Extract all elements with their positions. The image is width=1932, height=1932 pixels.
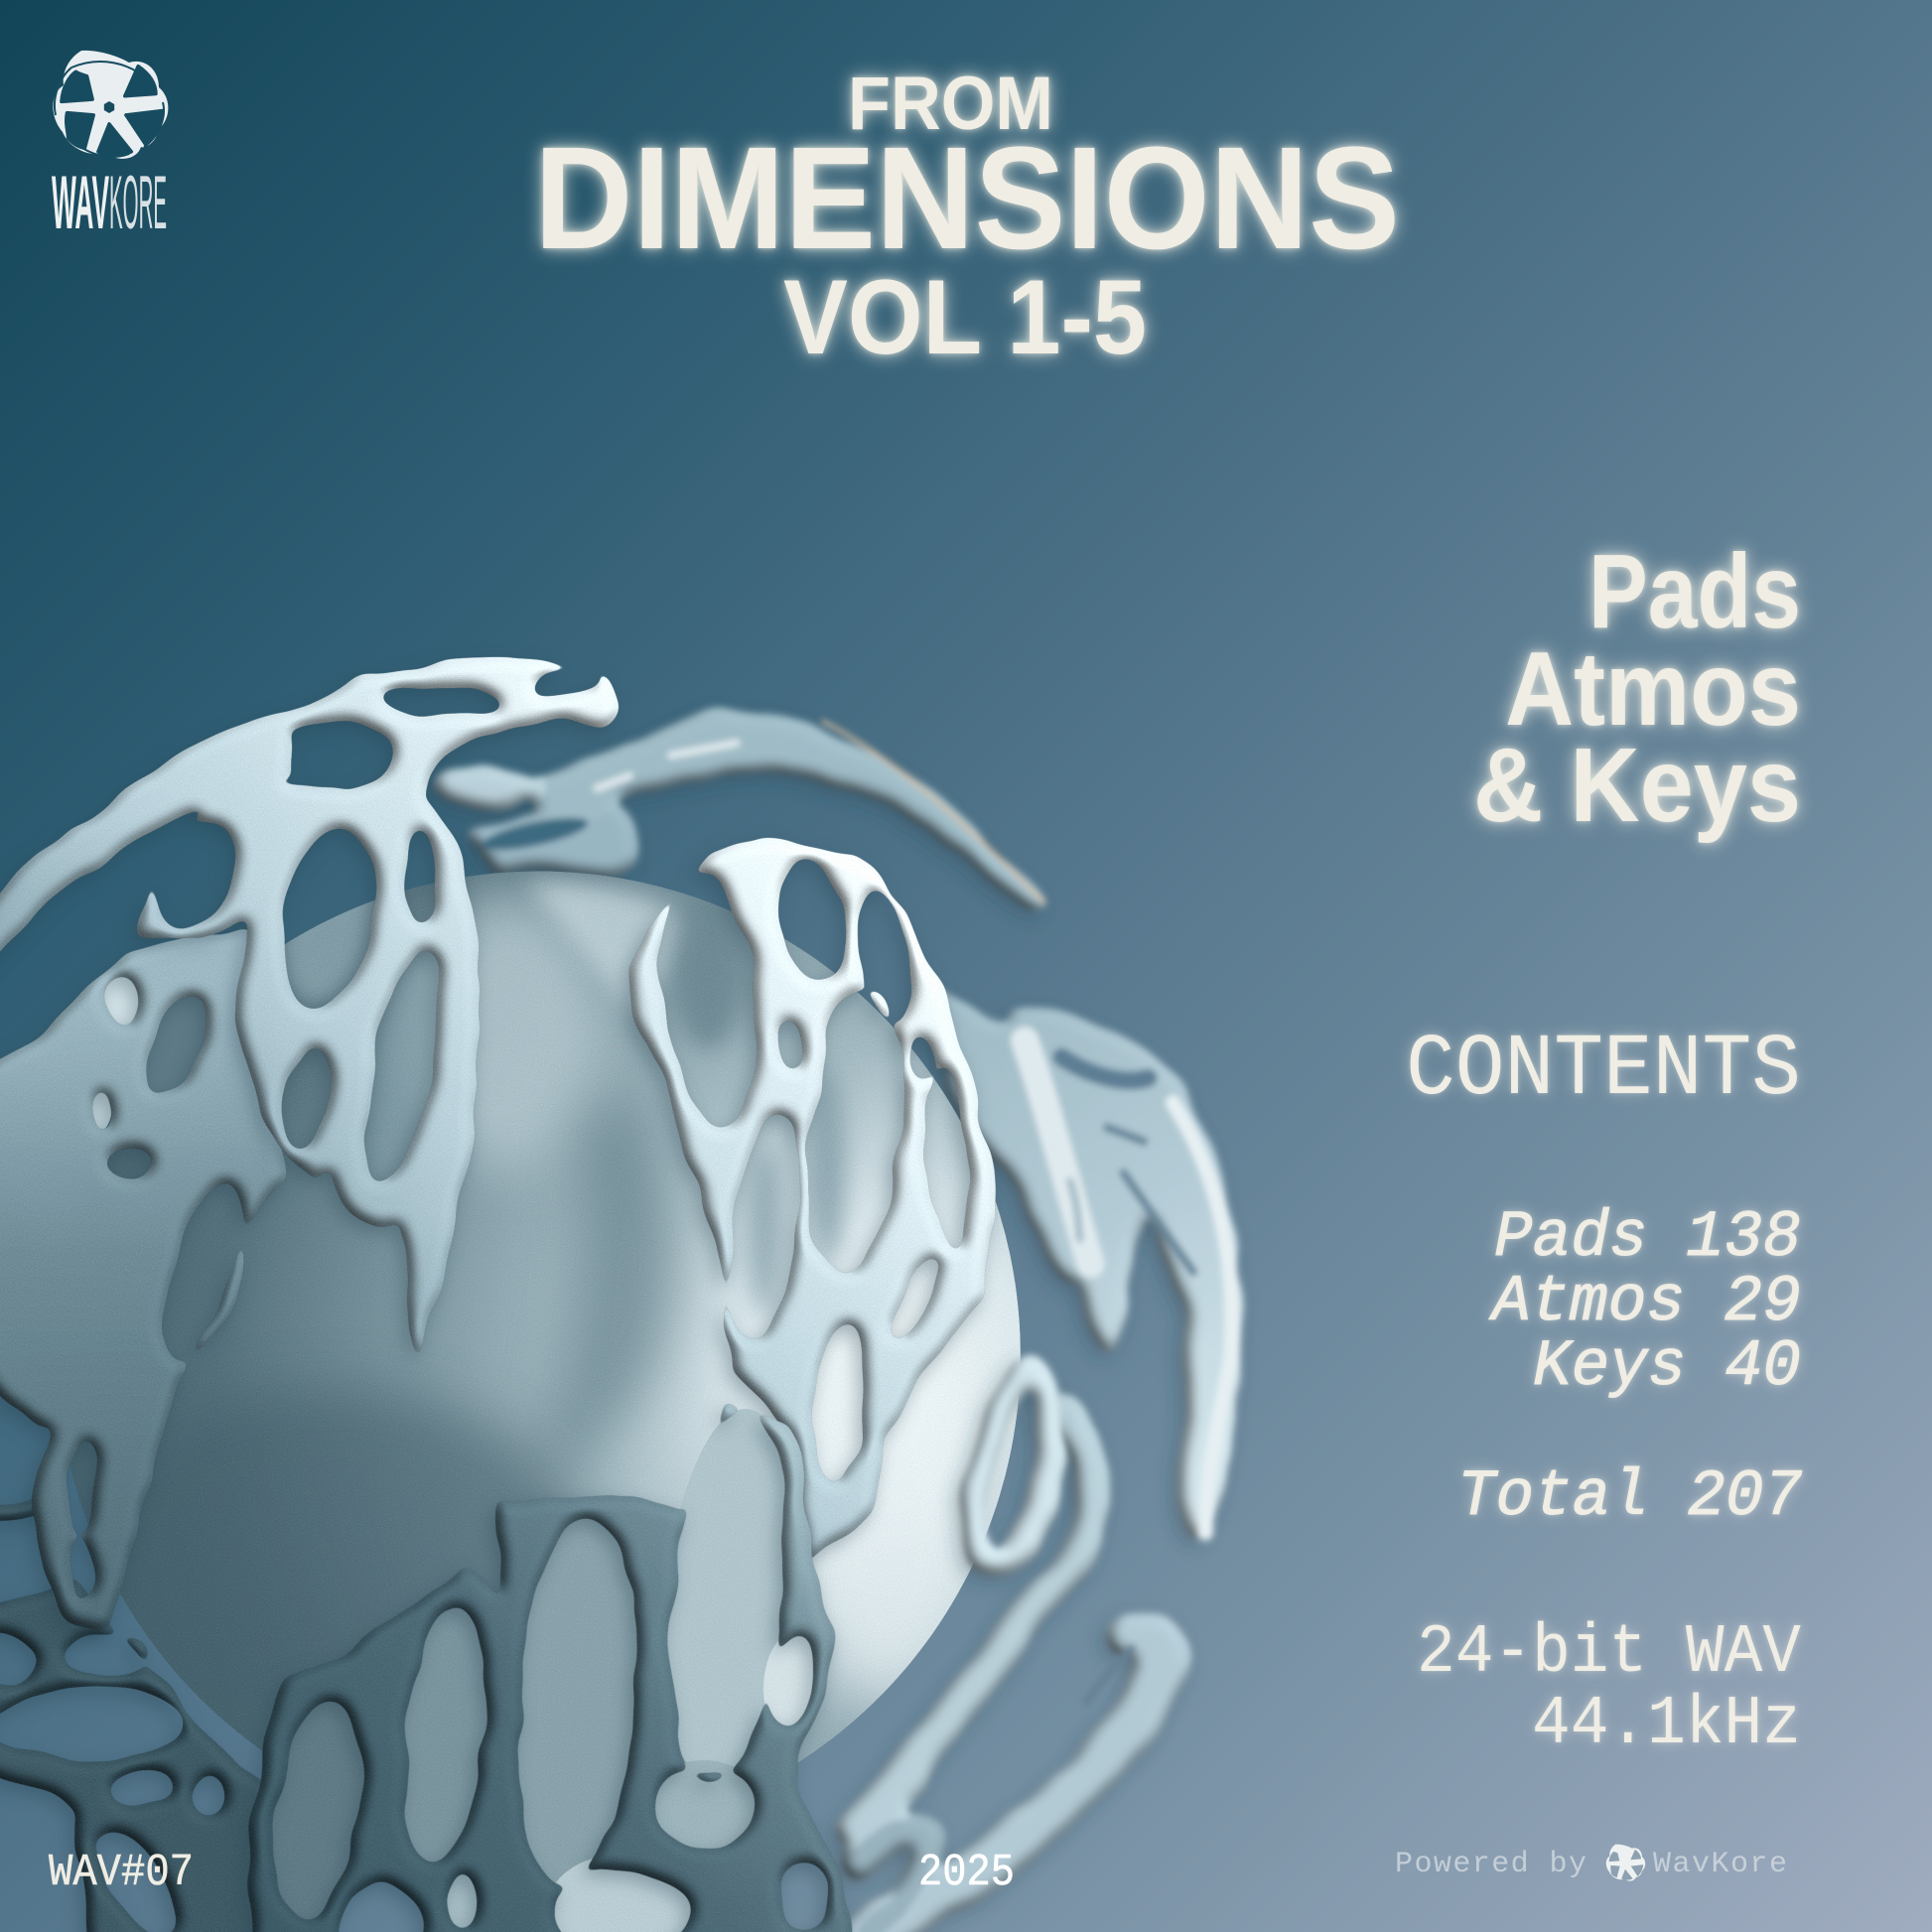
subtitle: Pads Atmos & Keys: & Keys bbox=[1473, 727, 1801, 844]
central right bright lattice bbox=[627, 838, 1000, 1562]
illustration: textured sphere with organic lattice bbox=[0, 660, 1243, 1932]
top cap, left arm and hanging ring structure bbox=[0, 660, 619, 1359]
top cap bbox=[220, 660, 619, 805]
title line: FROM: FROM bbox=[848, 62, 1053, 146]
audio format bbox=[1417, 1614, 1801, 1764]
subtitle: Pads Atmos & Keys: Pads bbox=[1588, 533, 1801, 650]
sphere body bbox=[69, 872, 1021, 1763]
left lattice mass bbox=[0, 933, 284, 1628]
interior fills behind left lattice bbox=[85, 974, 224, 1132]
back lattice at lower left bbox=[0, 1504, 280, 1932]
year: 2025 bbox=[918, 1848, 1015, 1898]
hanging rings bbox=[138, 781, 480, 1359]
right blurred leaf cluster bbox=[934, 987, 1243, 1544]
lower-right bands bbox=[856, 1409, 1163, 1932]
text: KORE bbox=[109, 161, 167, 245]
subtitle: Pads Atmos & Keys bbox=[1473, 533, 1801, 844]
contents list bbox=[1488, 1200, 1801, 1404]
contents list: Atmos 29 bbox=[1488, 1265, 1801, 1339]
WavKore text: WavKore bbox=[1653, 1848, 1787, 1881]
lower dark honeycomb lattice bbox=[247, 1401, 849, 1932]
contents list: Pads 138 bbox=[1494, 1200, 1801, 1275]
logo wordmark: WAV bbox=[52, 161, 109, 245]
powered by WavKore bbox=[1395, 1845, 1787, 1881]
logo emblem bbox=[53, 51, 168, 159]
audio format: 24-bit WAV bbox=[1417, 1614, 1801, 1693]
audio format: 44.1kHz bbox=[1532, 1686, 1801, 1764]
icon: small WavKore emblem bbox=[1606, 1845, 1645, 1881]
lower-right ring bbox=[962, 1367, 1066, 1572]
title bbox=[534, 62, 1400, 376]
contents list: Keys 40 bbox=[1533, 1329, 1801, 1404]
powered by text: Powered by bbox=[1395, 1848, 1587, 1881]
lower honeycomb cell interiors bbox=[252, 1402, 821, 1932]
catalogue number: WAV#07 bbox=[49, 1848, 194, 1898]
title line: VOL 1-5: VOL 1-5 bbox=[783, 257, 1147, 376]
subtitle: Pads Atmos & Keys: Atmos bbox=[1505, 630, 1801, 748]
contents heading: CONTENTS bbox=[1406, 1022, 1801, 1120]
left arm bbox=[0, 710, 296, 987]
upper swoosh arm bbox=[431, 712, 1050, 912]
total count: Total 207 bbox=[1457, 1459, 1802, 1534]
title line: DIMENSIONS: DIMENSIONS bbox=[534, 117, 1400, 280]
logo: WavKore emblem and wordmark bbox=[52, 51, 168, 245]
